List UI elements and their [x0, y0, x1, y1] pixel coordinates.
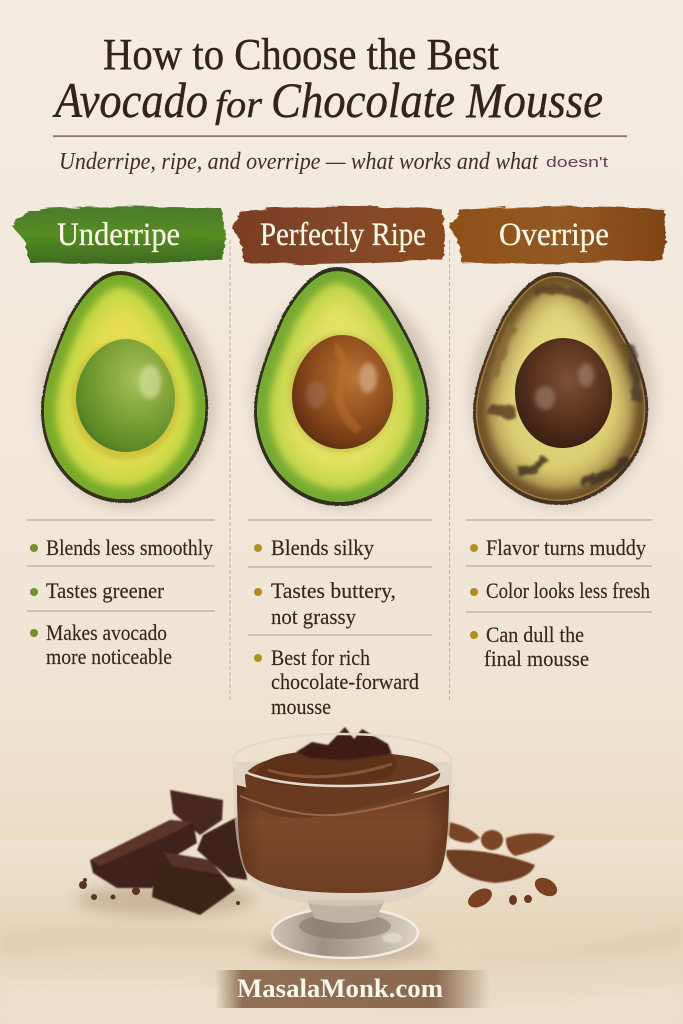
list: underripe: Blends less smoothly — [46, 535, 214, 560]
list: perfectly ripe — [248, 520, 432, 719]
subtitle: doesn't — [546, 154, 609, 171]
list: overripe: Can dull the — [486, 622, 584, 647]
column dividers — [230, 240, 450, 700]
list: underripe: Tastes greener — [46, 578, 164, 603]
title: Chocolate Mousse — [271, 72, 603, 128]
watermark band — [215, 970, 490, 1008]
banner: perfectly ripe: Perfectly Ripe — [260, 217, 426, 253]
list: overripe: Color looks less fresh — [486, 578, 650, 603]
icon: underripe avocado — [33, 265, 217, 508]
list: overripe: final mousse — [484, 646, 589, 671]
list: overripe: Flavor turns muddy — [486, 535, 647, 560]
list: underripe — [27, 520, 215, 669]
chocolate chunks — [75, 790, 255, 916]
cacao pieces — [445, 822, 560, 911]
banner: perfectly ripe — [232, 206, 446, 264]
glass foot — [272, 900, 418, 958]
list: underripe: Makes avocado — [46, 620, 167, 645]
banner: overripe — [450, 206, 666, 264]
banner: underripe: Underripe — [57, 217, 180, 253]
list: perfectly ripe: not grassy — [271, 604, 357, 629]
list: perfectly ripe: Blends silky — [271, 535, 375, 560]
title: for — [215, 84, 262, 126]
list: perfectly ripe: Tastes buttery, — [271, 578, 396, 603]
subtitle: Underripe, ripe, and overripe — what works and what — [59, 149, 539, 175]
title — [52, 30, 603, 128]
list: perfectly ripe: Best for rich — [271, 645, 370, 670]
banner: overripe: Overripe — [499, 217, 609, 253]
list: overripe — [466, 520, 652, 671]
glass bowl with mousse — [233, 727, 452, 906]
icon: overripe avocado — [465, 266, 657, 507]
icon: ripe avocado — [246, 260, 438, 509]
watermark band: MasalaMonk.com — [237, 974, 443, 1003]
banner: underripe — [12, 206, 226, 264]
title: How to Choose the Best — [103, 30, 499, 79]
list: perfectly ripe: chocolate-forward — [271, 669, 419, 694]
list: underripe: more noticeable — [46, 644, 172, 669]
title rule — [53, 136, 627, 137]
title: Avocado — [52, 72, 208, 128]
list: perfectly ripe: mousse — [271, 694, 331, 719]
mousse glass — [233, 727, 452, 962]
